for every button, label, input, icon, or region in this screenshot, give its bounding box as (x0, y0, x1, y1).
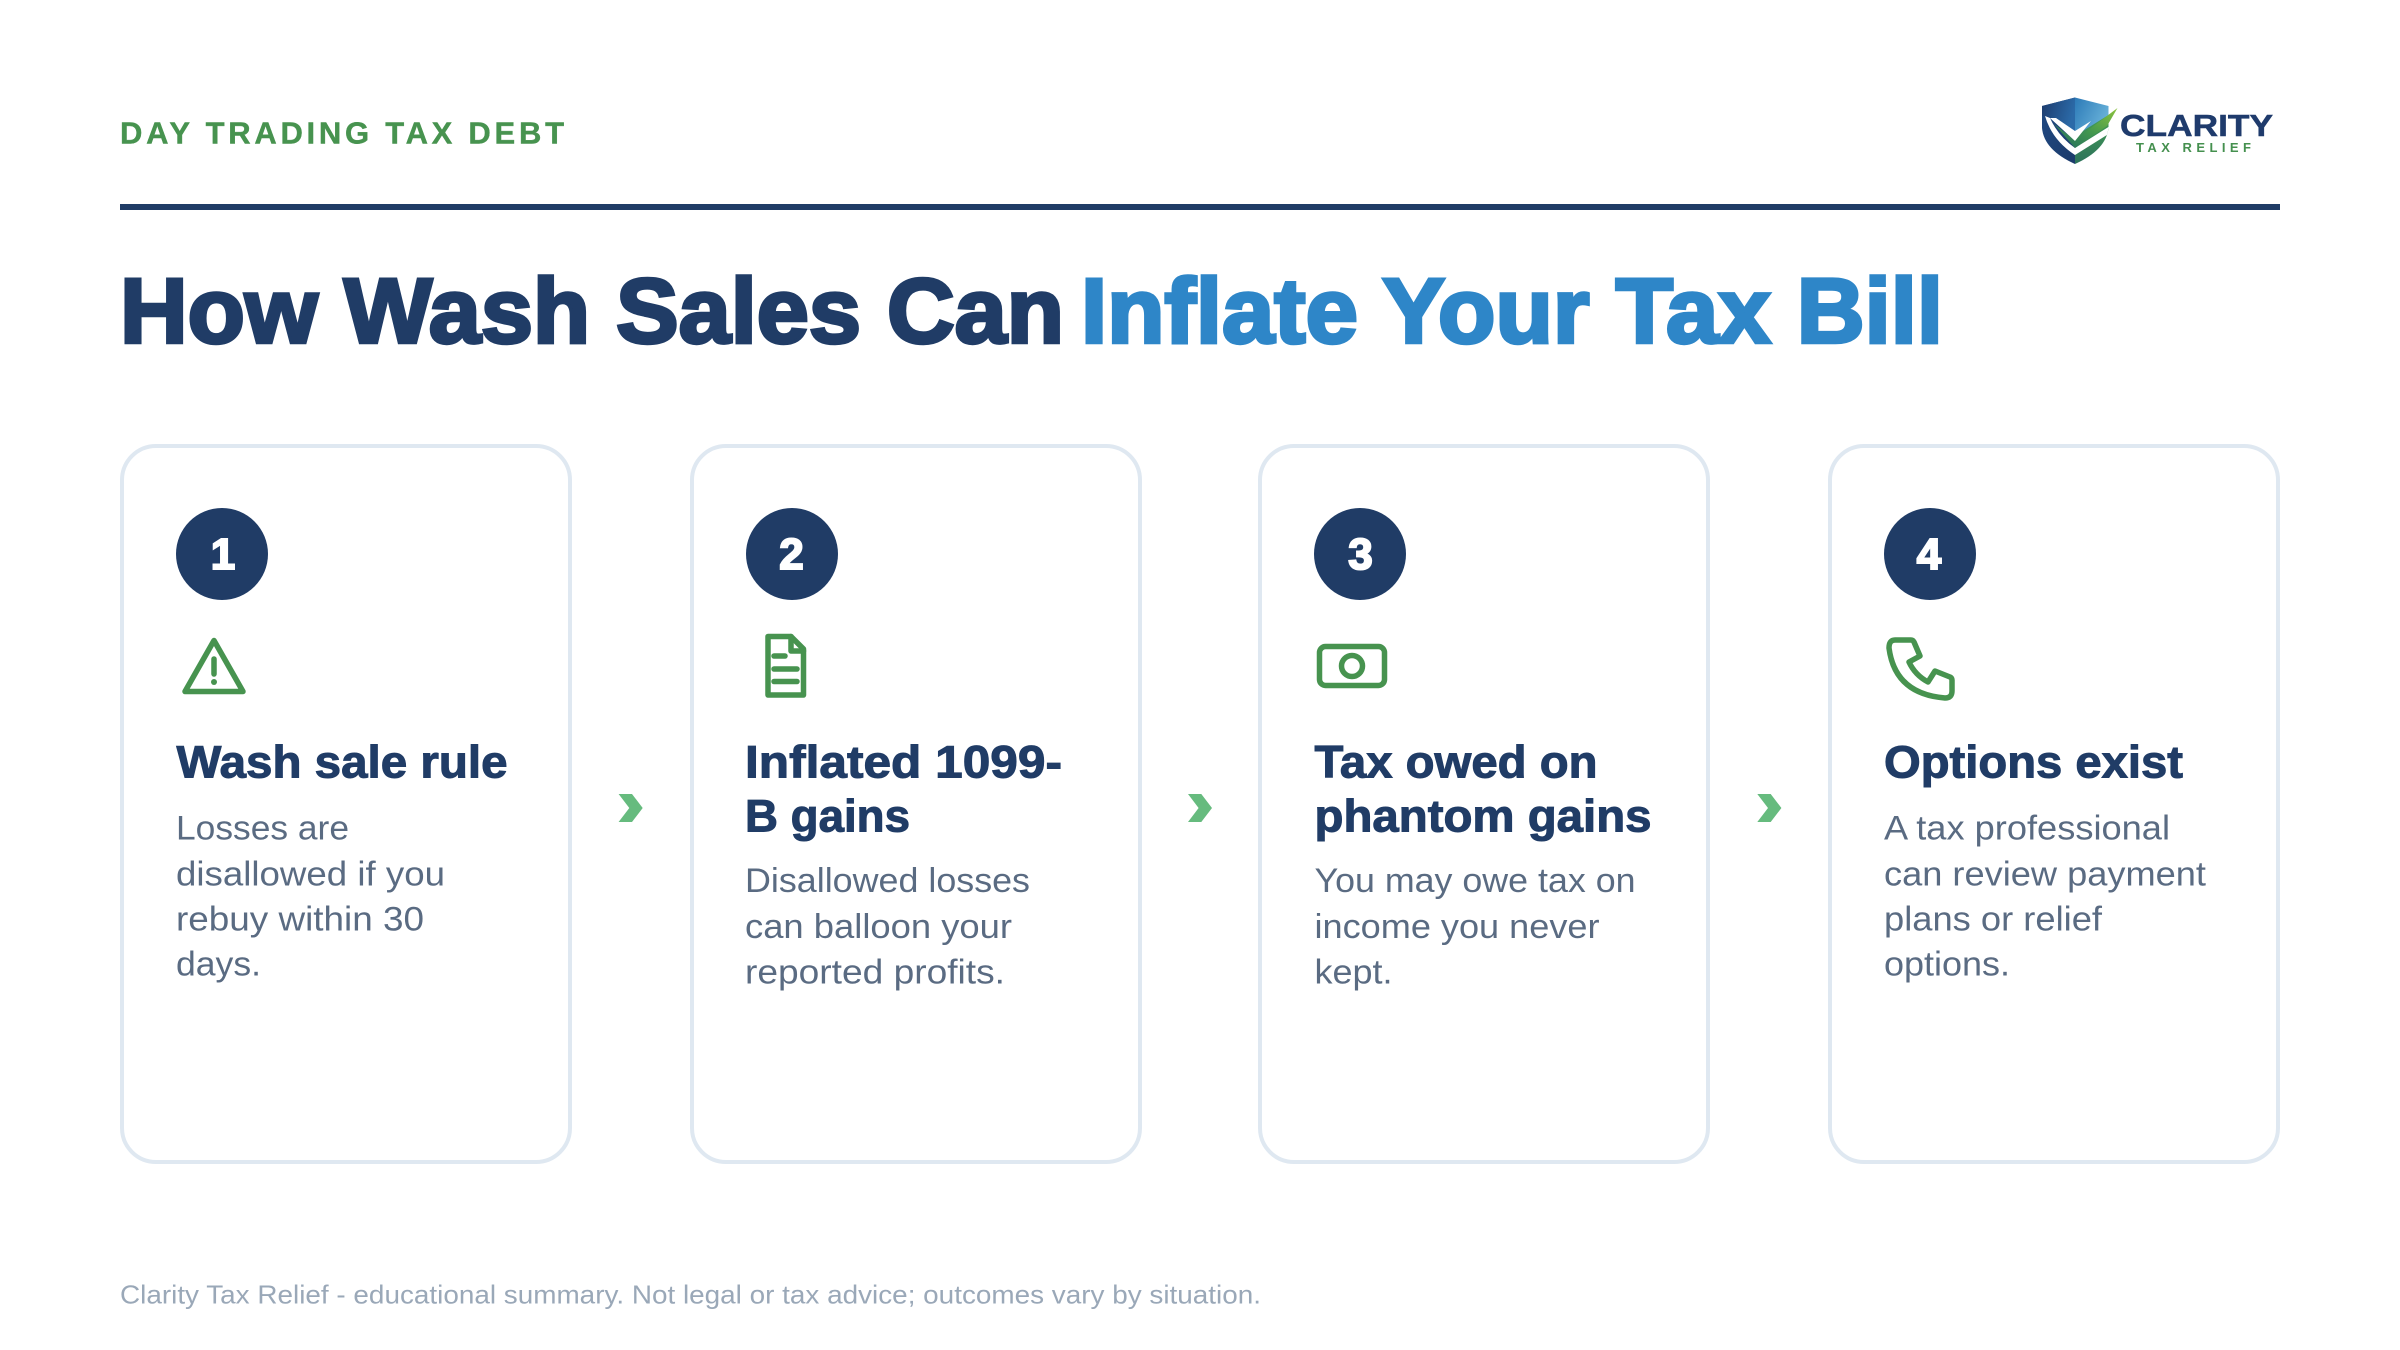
logo wordmark: CLARITY (2120, 108, 2273, 143)
step number 1 (176, 508, 268, 600)
step 1 body: Losses are (176, 810, 349, 848)
step 3 body: You may owe tax on (1314, 862, 1636, 900)
panel: step 4 options exist (1830, 446, 2278, 1162)
panel: step 1 wash sale rule (122, 446, 570, 1162)
step number 3 (1314, 508, 1406, 600)
step 3 heading (1314, 736, 1652, 842)
step number 2: 2 (779, 530, 804, 579)
step 4 body (1884, 810, 2207, 984)
step number 4 (1884, 508, 1976, 600)
step 1 body: days. (176, 946, 261, 984)
step number 4: 4 (1917, 530, 1942, 579)
step 4 body: can review payment (1884, 856, 2207, 894)
arrow 2 (1188, 794, 1212, 822)
step 2 body: can balloon your (745, 908, 1012, 946)
step 1 body: rebuy within 30 (176, 900, 424, 938)
step 2 heading: Inflated 1099- (745, 736, 1062, 788)
step 3 body: income you never (1314, 908, 1600, 946)
footer disclaimer: Clarity Tax Relief - educational summary. Not legal or tax advice; outcomes vary by situation. (120, 1280, 1261, 1310)
step 1 body (176, 810, 445, 984)
icon: shield with check (2042, 98, 2118, 164)
title: Inflate Your Tax Bill (1081, 260, 1943, 362)
step 3 body (1314, 862, 1636, 992)
step 3 heading: phantom gains (1314, 790, 1652, 842)
step 4 body: A tax professional (1884, 810, 2170, 848)
panel: step 3 tax owed on phantom gains (1260, 446, 1708, 1162)
step 2 body: reported profits. (745, 954, 1005, 992)
step 2 body (745, 862, 1030, 992)
icon: banknote (1320, 646, 1384, 686)
header rule (120, 204, 2280, 210)
icon: phone (1889, 640, 1952, 698)
eyebrow heading: DAY TRADING TAX DEBT (120, 116, 564, 150)
panel: step 2 inflated 1099-B gains (692, 446, 1140, 1162)
step 3 heading: Tax owed on (1314, 736, 1598, 788)
step 2 body: Disallowed losses (745, 862, 1030, 900)
step 2 heading: B gains (745, 790, 910, 842)
title: How Wash Sales Can (120, 260, 1064, 362)
step 4 body: options. (1884, 946, 2010, 984)
step 4 heading: Options exist (1884, 736, 2183, 788)
step 2 heading (745, 736, 1062, 842)
step number 2 (746, 508, 838, 600)
step 4 body: plans or relief (1884, 900, 2103, 938)
icon: document (768, 636, 804, 695)
arrow 1 (619, 794, 643, 822)
step 1 heading: Wash sale rule (176, 736, 508, 788)
logo: Clarity Tax Relief (2040, 95, 2273, 167)
step 3 body: kept. (1314, 954, 1392, 992)
arrow 3 (1757, 794, 1781, 822)
step number 1: 1 (211, 530, 235, 579)
logo tagline: TAX RELIEF (2136, 140, 2251, 155)
step number 3: 3 (1348, 530, 1373, 579)
icon: warning triangle (185, 640, 243, 692)
step 1 body: disallowed if you (176, 856, 445, 894)
title (120, 260, 1943, 362)
